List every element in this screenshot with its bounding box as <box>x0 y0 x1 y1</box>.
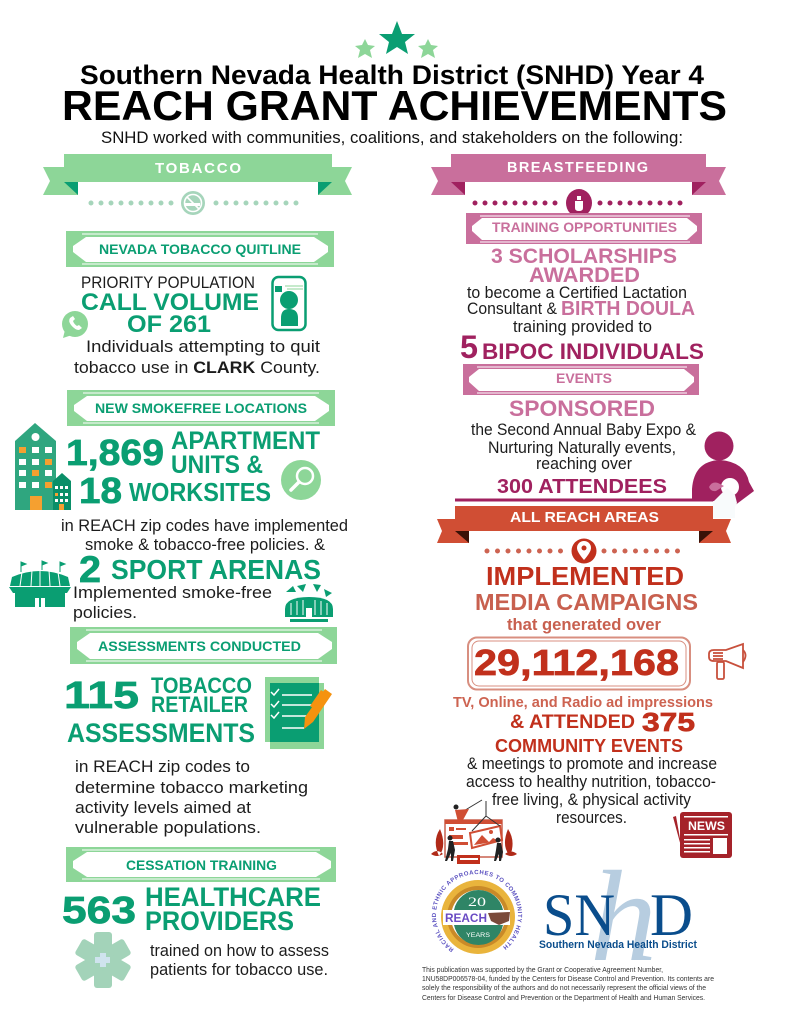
block: sponsored events: Nurturing Naturally events, <box>488 438 676 457</box>
block: apartments and worksites: 18 <box>79 470 122 511</box>
text: funding disclaimer: solely the responsibility of the authors and do not necessarily represent the official views of the <box>422 985 706 992</box>
text: policies: in REACH zip codes have implemented <box>61 516 348 535</box>
banner: tobacco: TOBACCO <box>155 160 241 177</box>
icon: phone with person <box>272 277 306 330</box>
block: retailer assessments: TOBACCO <box>151 673 252 698</box>
icon: stadium right <box>285 584 333 622</box>
block: ad impressions and community events <box>453 694 717 827</box>
block: ad impressions and community events: TV, Online, and Radio ad impressions <box>453 694 713 711</box>
text: trained on tobacco use: trained on how to assess <box>150 941 329 960</box>
block: scholarships: 3 SCHOLARSHIPS <box>491 245 677 268</box>
text: trained on tobacco use <box>150 941 329 979</box>
block: retailer assessments: ASSESSMENTS <box>67 718 255 748</box>
icon: stadium left <box>9 561 71 607</box>
block: sponsored events: the Second Annual Baby Expo & <box>471 420 697 439</box>
block: apartments and worksites: UNITS & <box>171 451 263 479</box>
label: new smokefree locations: NEW SMOKEFREE LOCATIONS <box>95 400 307 416</box>
block: scholarships: Consultant & <box>467 299 558 318</box>
callout: impressions number: 29,112,168 <box>474 642 679 683</box>
block: implemented media campaigns: MEDIA CAMPAIGNS <box>475 589 698 615</box>
logo: SNHD: h <box>590 845 657 989</box>
icon: star of life <box>74 932 132 988</box>
label: nevada tobacco quitline: NEVADA TOBACCO QUITLINE <box>99 241 301 257</box>
block: ad impressions and community events: free living, & physical activity <box>492 790 691 809</box>
icon: checklist with pencil <box>265 677 332 749</box>
block: apartments and worksites: APARTMENT <box>171 427 320 455</box>
block: implemented media campaigns <box>475 561 698 634</box>
icon: apartment buildings <box>15 423 71 510</box>
icon: three stars <box>355 21 438 58</box>
label: events: EVENTS <box>556 370 612 386</box>
block: implemented media campaigns: IMPLEMENTED <box>486 561 684 591</box>
block: call volume <box>74 273 320 377</box>
label: training opportunities: TRAINING OPPORTUNITIES <box>492 219 677 235</box>
block: call volume: OF 261 <box>127 311 211 338</box>
panel: tobacco column <box>9 154 352 988</box>
text: funding disclaimer <box>422 967 714 1002</box>
block: ad impressions and community events: & ATTENDED <box>510 712 635 733</box>
text: assessment description: determine tobacco marketing <box>75 778 308 797</box>
text: policies: smoke & tobacco-free policies. & <box>85 535 326 554</box>
banner: breastfeeding <box>431 154 726 195</box>
text: funding disclaimer: This publication was supported by the Grant or Cooperative Agreement Number, <box>422 967 663 974</box>
panel: all reach areas column <box>422 506 746 1002</box>
label: events <box>463 364 699 395</box>
block: sport arenas: SPORT ARENAS <box>111 554 321 585</box>
icon: no smoking with dotted divider <box>91 191 305 215</box>
label: assessments conducted: ASSESSMENTS CONDUCTED <box>98 638 301 654</box>
logo: SNHD: D <box>650 882 693 948</box>
block: healthcare providers: PROVIDERS <box>145 906 294 936</box>
icon: billboard illustration <box>431 800 517 864</box>
icon: magnifier <box>281 460 321 500</box>
label: cessation training <box>66 847 336 882</box>
icon: bottle with dotted divider <box>475 189 687 217</box>
title: Southern Nevada Health District (SNHD) Year 4 <box>80 60 704 90</box>
block: sponsored events: reaching over <box>536 454 632 473</box>
block: scholarships: BIPOC INDIVIDUALS <box>482 339 704 364</box>
block: retailer assessments <box>64 673 255 748</box>
text: assessment description <box>75 757 308 837</box>
panel: breastfeeding column <box>431 154 754 518</box>
title <box>62 60 727 129</box>
block: apartments and worksites: WORKSITES <box>129 477 271 507</box>
block: scholarships <box>460 245 704 365</box>
block: scholarships: training provided to <box>513 317 652 336</box>
banner: all reach areas: ALL REACH AREAS <box>510 510 659 526</box>
divider line <box>455 498 713 502</box>
block: healthcare providers: HEALTHCARE <box>145 882 321 912</box>
banner: breastfeeding: BREASTFEEDING <box>507 160 648 176</box>
callout: impressions number <box>468 638 690 690</box>
subtitle: SNHD worked with communities, coalitions, and stakeholders on the following: <box>101 128 683 147</box>
label: cessation training: CESSATION TRAINING <box>126 857 277 873</box>
text: funding disclaimer: 1NU58DP006578-04, funded by the Centers for Disease Control and Prevention. Its contents are <box>422 976 714 983</box>
text: funding disclaimer: Centers for Disease Control and Prevention or the Department of Health and Human Services. <box>422 995 705 1002</box>
block: healthcare providers <box>62 882 321 936</box>
icon: newspaper <box>673 812 732 858</box>
logo: SNHD <box>539 845 697 989</box>
label: training opportunities <box>466 213 702 244</box>
label: new smokefree locations <box>67 390 335 426</box>
label: nevada tobacco quitline <box>66 231 334 267</box>
block: sport arenas: Implemented smoke-free <box>73 583 272 602</box>
text: policies <box>61 516 348 554</box>
block: ad impressions and community events: COMMUNITY EVENTS <box>495 736 683 756</box>
icon: mother nursing <box>692 432 754 518</box>
block: apartments and worksites: 1,869 <box>66 432 164 473</box>
block: ad impressions and community events: & meetings to promote and increase <box>467 754 717 773</box>
block: scholarships: AWARDED <box>529 264 640 287</box>
block: retailer assessments: RETAILER <box>151 692 248 717</box>
logo: SNHD: SN <box>543 882 615 948</box>
icon: megaphone <box>709 644 746 679</box>
logo: REACH 20 years: 20 <box>468 894 486 909</box>
block: sport arenas: 2 <box>79 549 101 590</box>
logo: REACH 20 years: YEARS <box>466 933 490 939</box>
block: scholarships: to become a Certified Lactation <box>467 283 687 302</box>
block: sport arenas <box>73 549 321 622</box>
block: scholarships: BIRTH DOULA <box>561 298 695 320</box>
icon: chat bubble with handset <box>62 311 88 338</box>
block: sport arenas: policies. <box>73 603 137 622</box>
block: healthcare providers: 563 <box>62 890 136 932</box>
block: call volume: tobacco use in CLARK County. <box>74 358 320 377</box>
block: implemented media campaigns: that generated over <box>507 615 661 634</box>
icon: newspaper: NEWS <box>688 819 725 833</box>
text: assessment description: in REACH zip codes to <box>75 757 250 776</box>
text: assessment description: activity levels aimed at <box>75 798 251 817</box>
title: REACH GRANT ACHIEVEMENTS <box>62 82 727 129</box>
block: call volume: PRIORITY POPULATION <box>81 273 255 292</box>
block: retailer assessments: 115 <box>64 675 139 717</box>
block: ad impressions and community events: resources. <box>556 808 627 827</box>
block: sponsored events: 300 ATTENDEES <box>497 476 667 498</box>
block: call volume: Individuals attempting to quit <box>86 337 320 356</box>
banner: all reach areas <box>437 506 731 543</box>
block: apartments and worksites <box>66 427 320 511</box>
block: scholarships: 5 <box>460 329 478 365</box>
text: assessment description: vulnerable populations. <box>75 818 261 837</box>
logo: SNHD: Southern Nevada Health District <box>539 939 697 951</box>
block: ad impressions and community events: access to healthy nutrition, tobacco- <box>466 772 716 791</box>
block: call volume: CALL VOLUME <box>81 289 259 316</box>
block: ad impressions and community events: 375 <box>642 707 695 737</box>
banner: tobacco <box>43 154 352 195</box>
block: sponsored events <box>471 396 697 498</box>
text: trained on tobacco use: patients for tobacco use. <box>150 960 328 979</box>
icon: location pin with dotted divider <box>487 538 685 564</box>
logo: REACH 20 years: REACH <box>445 911 487 925</box>
label: assessments conducted <box>70 627 337 664</box>
block: sponsored events: SPONSORED <box>509 396 655 421</box>
logo: REACH 20 years: RACIAL AND ETHNIC APPROACHES TO COMMUNITY HEALTH <box>432 870 522 952</box>
